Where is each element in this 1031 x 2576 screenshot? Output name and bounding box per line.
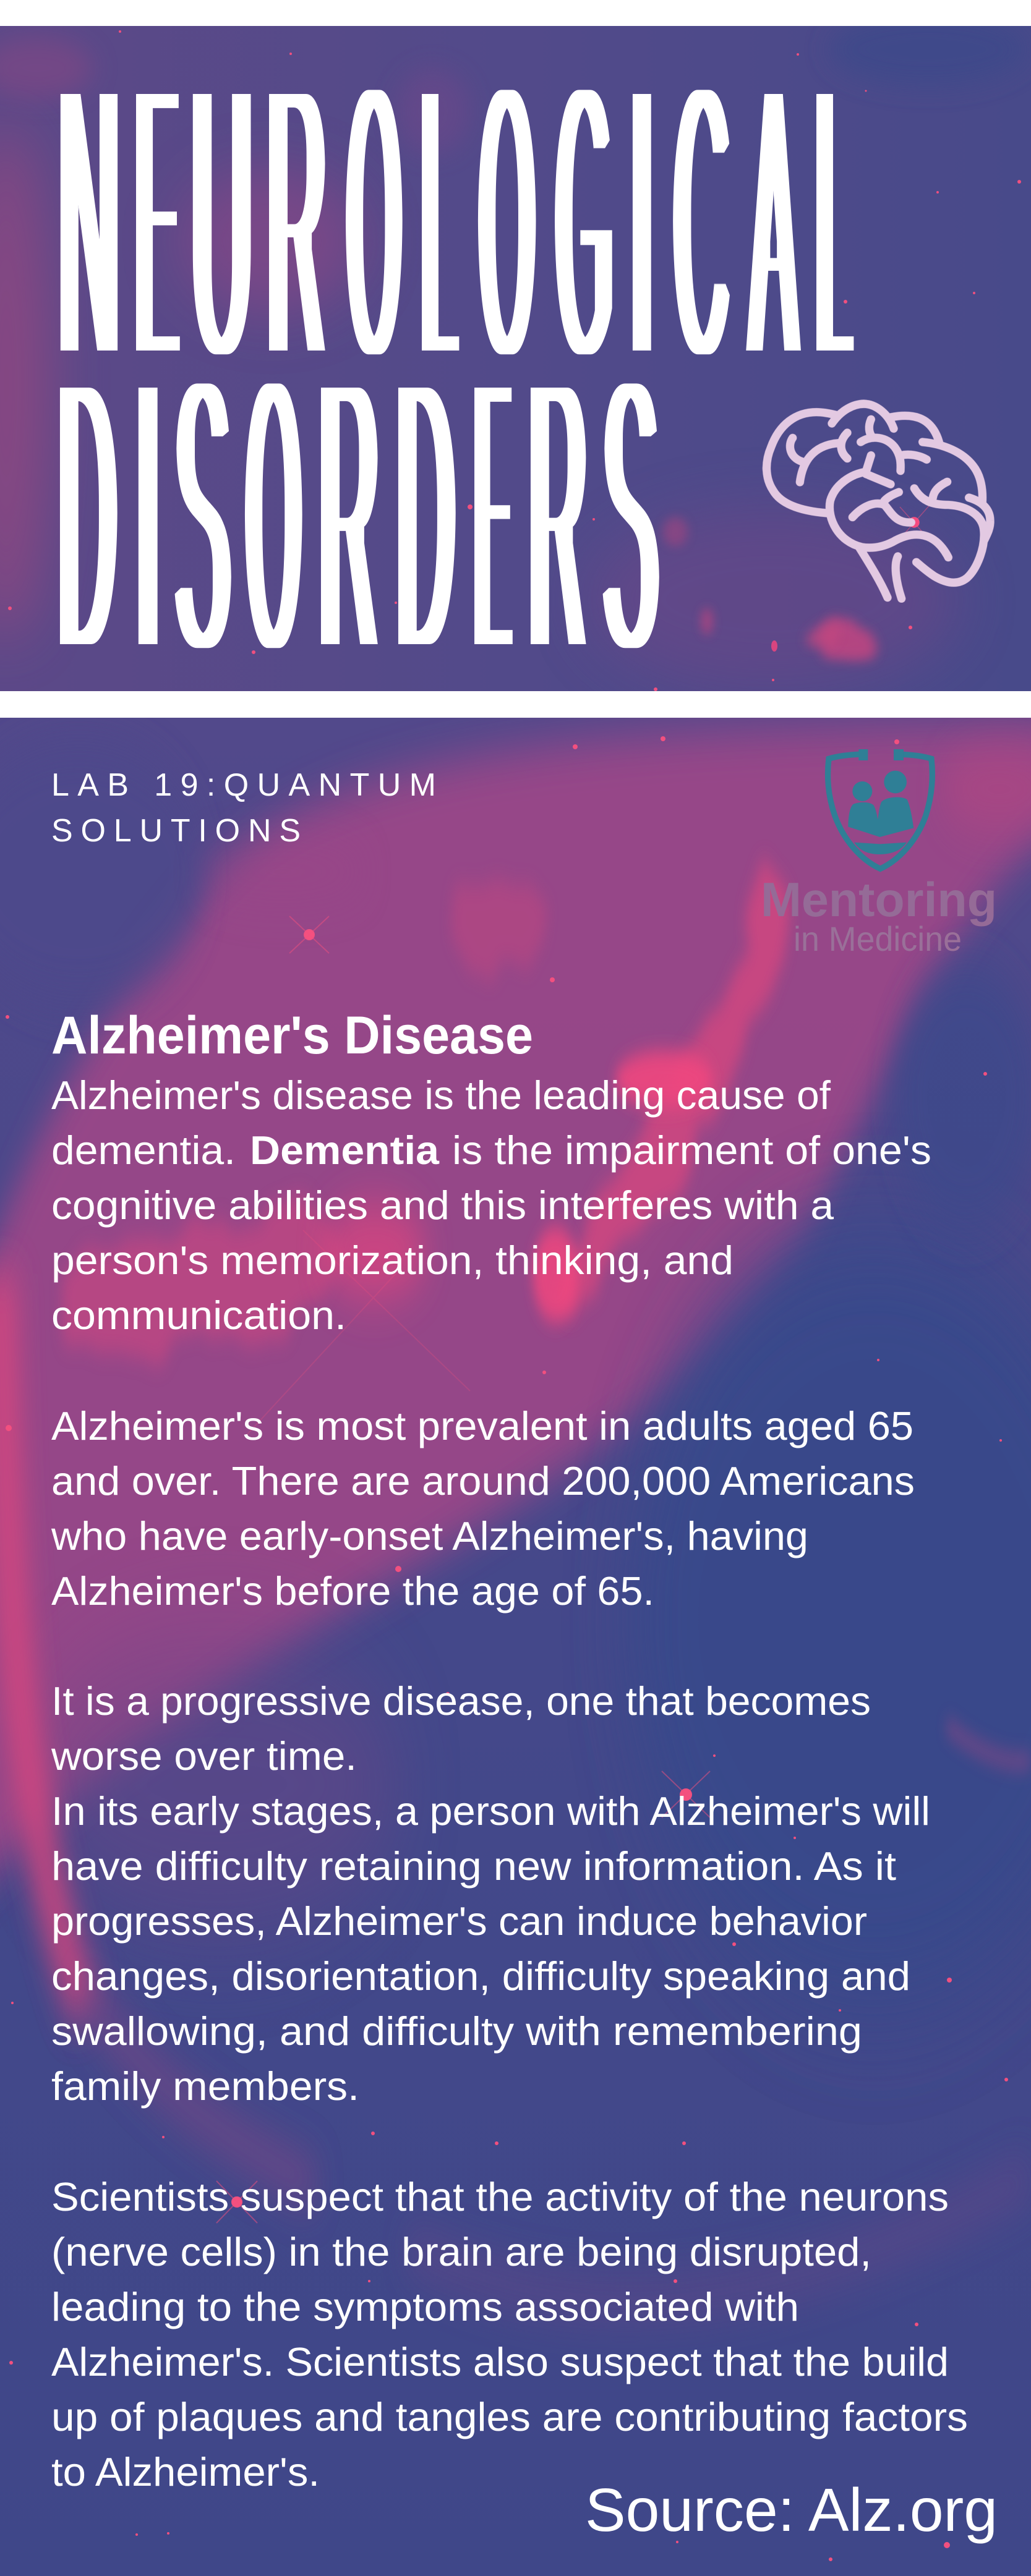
text block: causes paragraph: Scientists suspect that the activity of the neurons <box>51 2174 949 2219</box>
text block: prevalence paragraph: and over. There are around 200,000 Americans <box>51 1458 915 1503</box>
source credit: Source: Alz.org <box>585 2476 998 2544</box>
title line: NEUROLOGICAL: G <box>557 0 612 443</box>
logo tagline: in Medicine <box>794 919 962 958</box>
text block: causes paragraph: (nerve cells) in the brain are being disrupted, <box>51 2229 871 2274</box>
text block: definition paragraph: Dementia <box>250 1128 440 1173</box>
text block: causes paragraph: Alzheimer's. Scientists also suspect that the build <box>51 2339 949 2384</box>
title line: NEUROLOGICAL: C <box>675 0 729 443</box>
icon: brain <box>767 404 990 598</box>
logo: Mentoring in Medicine <box>761 749 997 958</box>
title line: DISORDERS: S <box>176 294 229 737</box>
text block: prevalence paragraph: Alzheimer's before the age of 65. <box>51 1568 654 1613</box>
text block: prevalence paragraph: Alzheimer's is most prevalent in adults aged 65 <box>51 1403 913 1448</box>
text block: progression paragraph: changes, disorientation, difficulty speaking and <box>51 1953 910 1999</box>
text block: definition paragraph <box>51 1073 931 1338</box>
title line: NEUROLOGICAL: R <box>268 0 325 443</box>
title line: NEUROLOGICAL: L <box>817 1 850 443</box>
title line: NEUROLOGICAL: L <box>422 1 456 443</box>
title line: NEUROLOGICAL: E <box>137 1 177 443</box>
text block: definition paragraph: communication. <box>51 1293 346 1338</box>
title line: NEUROLOGICAL: A <box>750 0 797 443</box>
text block: causes paragraph: leading to the symptoms associated with <box>51 2284 799 2329</box>
title line: DISORDERS <box>59 293 657 737</box>
title line: DISORDERS: D <box>59 294 116 736</box>
title line: NEUROLOGICAL: O <box>481 1 534 443</box>
text block: progression paragraph: In its early stages, a person with Alzheimer's will <box>51 1788 930 1834</box>
text block: progression paragraph: worse over time. <box>51 1733 357 1779</box>
panel: header nebula background <box>0 12 1031 692</box>
logo wordmark: Mentoring <box>761 872 997 927</box>
title line: DISORDERS: D <box>398 294 454 736</box>
title line: DISORDERS: S <box>604 294 657 737</box>
title <box>59 0 850 737</box>
icon: star bursts <box>216 916 710 2223</box>
text block: causes paragraph <box>51 2174 968 2494</box>
text block: progression paragraph: progresses, Alzheimer's can induce behavior <box>51 1898 867 1944</box>
text block: progression paragraph: swallowing, and difficulty with remembering <box>51 2009 862 2054</box>
title line: DISORDERS: R <box>530 294 586 736</box>
title line: NEUROLOGICAL: O <box>348 1 400 443</box>
text block: causes paragraph: to Alzheimer's. <box>51 2449 320 2494</box>
title line: NEUROLOGICAL <box>59 0 850 443</box>
title line: NEUROLOGICAL: I <box>631 0 652 443</box>
text block: causes paragraph: up of plaques and tangles are contributing factors <box>51 2394 968 2439</box>
text block: definition paragraph: is the impairment of one's <box>452 1128 931 1173</box>
subtitle: lab name: LAB 19:QUANTUM <box>51 767 436 803</box>
title line: NEUROLOGICAL: U <box>192 1 252 443</box>
icon: shield with mentor and student <box>828 749 932 869</box>
text block: prevalence paragraph: who have early-onset Alzheimer's, having <box>51 1513 808 1558</box>
title line: DISORDERS: I <box>136 294 160 737</box>
icon: star behind brain <box>898 504 931 541</box>
text block: prevalence paragraph <box>51 1403 915 1613</box>
text block: progression paragraph: It is a progressive disease, one that becomes <box>51 1678 871 1724</box>
title line: DISORDERS: R <box>320 294 378 737</box>
text block: progression paragraph: family members. <box>51 2064 359 2109</box>
title line: NEUROLOGICAL: N <box>59 1 119 443</box>
panel: main nebula background <box>0 718 1031 2576</box>
text block: definition paragraph: dementia. <box>51 1128 236 1173</box>
text block: definition paragraph: cognitive abilities and this interferes with a <box>51 1183 834 1228</box>
title line: DISORDERS: O <box>247 294 300 737</box>
text block: definition paragraph: person's memorization, thinking, and <box>51 1238 734 1283</box>
text block: definition paragraph: Alzheimer's disease is the leading cause of <box>51 1073 831 1118</box>
subtitle: lab name <box>51 767 436 849</box>
text block: progression paragraph: have difficulty retaining new information. As it <box>51 1843 896 1889</box>
subtitle: lab name: SOLUTIONS <box>51 813 301 849</box>
heading: Alzheimer's Disease: Alzheimer's Disease <box>51 1006 533 1065</box>
title line: DISORDERS: E <box>476 293 509 736</box>
text block: progression paragraph <box>51 1678 930 2109</box>
